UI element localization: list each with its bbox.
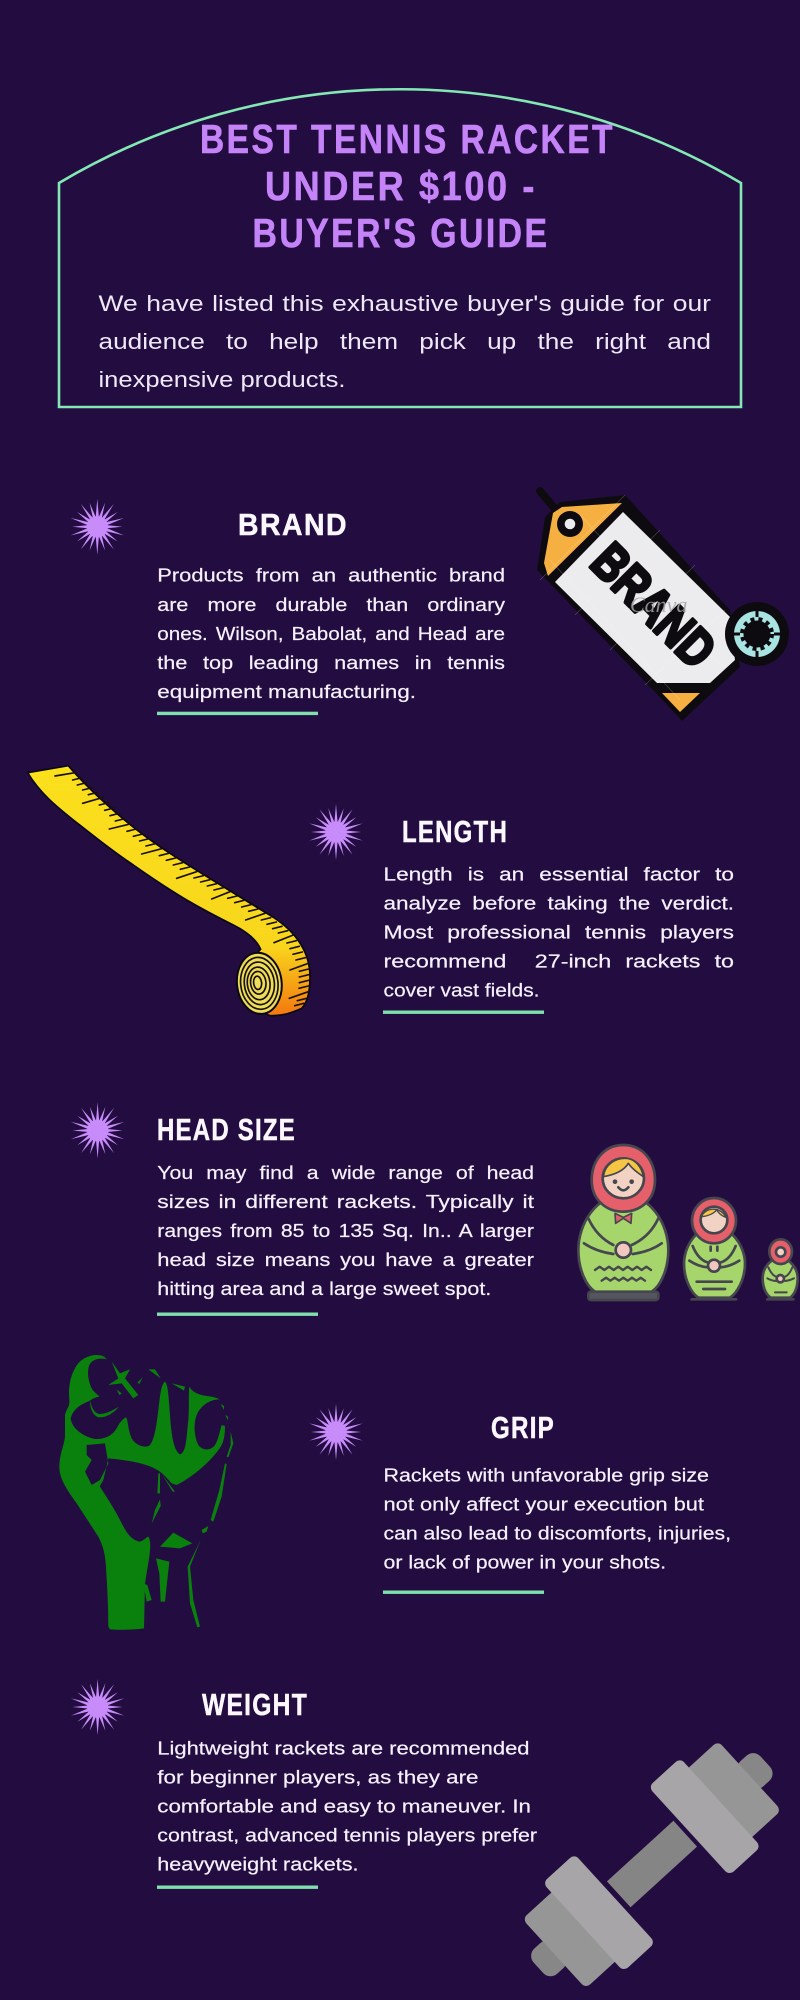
panel: brand bbox=[70, 491, 789, 721]
icon: star bbox=[70, 1102, 125, 1158]
text: weight: contrast, advanced tennis players prefer bbox=[157, 1826, 537, 1846]
text: length: Length is an essential factor to bbox=[384, 864, 734, 884]
underline bbox=[157, 1312, 318, 1316]
icon: star bbox=[309, 804, 363, 860]
icon: star bbox=[70, 499, 125, 555]
intro text: We have listed this exhaustive buyer's guide for our bbox=[98, 291, 712, 316]
underline bbox=[157, 1886, 318, 1889]
text: weight: comfortable and easy to maneuver. In bbox=[157, 1796, 531, 1816]
icon: dumbbell bbox=[522, 1741, 781, 1988]
underline bbox=[157, 712, 318, 715]
text: head size: hitting area and a large sweet spot. bbox=[157, 1279, 491, 1299]
heading: brand: BRAND bbox=[238, 507, 348, 542]
text: brand bbox=[157, 566, 505, 702]
text: head size: ranges from 85 to 135 Sq. In.. A larger bbox=[157, 1221, 534, 1241]
panel: weight bbox=[70, 1679, 781, 1988]
text: weight: Lightweight rackets are recommended bbox=[157, 1738, 530, 1758]
text: weight: for beginner players, as they are bbox=[157, 1768, 479, 1788]
title bbox=[200, 116, 615, 256]
icon: brand tag bbox=[537, 491, 789, 721]
underline bbox=[383, 1010, 544, 1014]
text: weight bbox=[157, 1738, 537, 1874]
text: length bbox=[384, 864, 734, 1000]
text: grip: not only affect your execution but bbox=[384, 1494, 704, 1514]
text: brand: Products from an authentic brand bbox=[157, 566, 505, 586]
icon: nesting dolls bbox=[578, 1145, 798, 1300]
text: grip: can also lead to discomforts, injuries, bbox=[384, 1524, 731, 1544]
intro text bbox=[98, 291, 712, 392]
intro text: inexpensive products. bbox=[98, 367, 346, 392]
text: length: Most professional tennis players bbox=[384, 922, 734, 942]
text: brand: ones. Wilson, Babolat, and Head are bbox=[157, 624, 505, 644]
text: head size: You may find a wide range of head bbox=[157, 1163, 534, 1183]
underline bbox=[383, 1590, 544, 1594]
text: weight: heavyweight rackets. bbox=[157, 1854, 358, 1874]
brand lettering: BRAND bbox=[580, 532, 727, 680]
small doll bbox=[763, 1239, 798, 1299]
heading: head size: HEAD SIZE bbox=[157, 1112, 296, 1147]
icon: star bbox=[309, 1404, 363, 1460]
panel: grip bbox=[59, 1355, 731, 1630]
text: brand: the top leading names in tennis bbox=[157, 653, 505, 673]
text: length: cover vast fields. bbox=[384, 980, 540, 1000]
big doll bbox=[578, 1145, 668, 1300]
panel: head size bbox=[70, 1102, 798, 1316]
title: UNDER $100 - bbox=[265, 163, 537, 209]
intro text: audience to help them pick up the right and bbox=[98, 329, 711, 354]
heading: weight: WEIGHT bbox=[202, 1687, 308, 1722]
text: grip bbox=[384, 1466, 731, 1572]
heading: length: LENGTH bbox=[402, 814, 508, 849]
icon: raised fist bbox=[59, 1355, 233, 1630]
text: grip: or lack of power in your shots. bbox=[384, 1552, 666, 1572]
title: BEST TENNIS RACKET bbox=[200, 116, 615, 162]
text: head size: head size means you have a greater bbox=[157, 1250, 534, 1270]
text: brand: equipment manufacturing. bbox=[157, 682, 416, 702]
text: head size bbox=[157, 1163, 534, 1299]
text: length: analyze before taking the verdict. bbox=[384, 894, 734, 914]
middle doll bbox=[684, 1198, 745, 1299]
text: length: recommend 27-inch rackets to bbox=[384, 952, 734, 972]
text: brand: are more durable than ordinary bbox=[157, 595, 505, 615]
arch frame bbox=[59, 89, 741, 407]
panel: length bbox=[28, 766, 734, 1016]
panel: header arch bbox=[59, 89, 741, 407]
icon: star bbox=[70, 1679, 125, 1735]
heading: grip: GRIP bbox=[491, 1410, 555, 1445]
icon: tape measure bbox=[28, 766, 310, 1016]
text: head size: sizes in different rackets. Typically it bbox=[157, 1192, 534, 1212]
text: grip: Rackets with unfavorable grip size bbox=[384, 1466, 709, 1486]
title: BUYER'S GUIDE bbox=[252, 210, 550, 256]
watermark: Canva bbox=[630, 592, 687, 617]
